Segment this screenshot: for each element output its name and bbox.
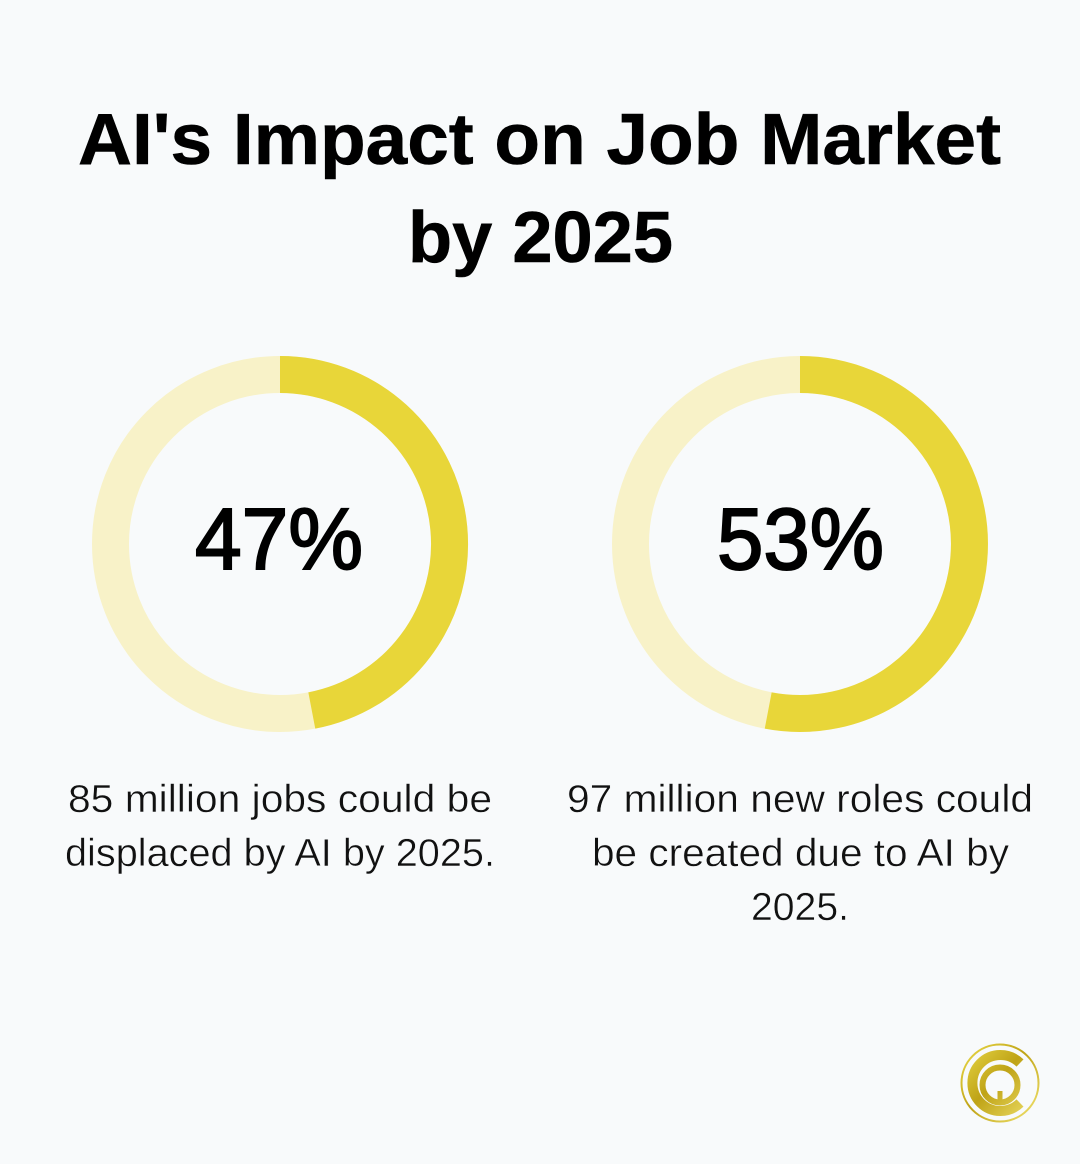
description: roles created: 2025.	[751, 886, 849, 929]
description: jobs displaced: 85 million jobs could be	[68, 778, 492, 821]
description: jobs displaced: displaced by AI by 2025.	[65, 832, 495, 875]
title: AI's Impact on Job Market	[78, 100, 1001, 180]
panel: 53% roles created	[567, 374, 1033, 929]
donut chart: 47%	[110, 374, 450, 714]
icon: gold CQ logo	[962, 1044, 1038, 1122]
title	[78, 100, 1001, 278]
description: roles created: be created due to AI by	[592, 832, 1010, 875]
panel: 47% jobs displaced	[65, 374, 495, 875]
value: 53%: 53%	[717, 491, 884, 588]
value: 47%: 47%	[195, 491, 363, 588]
title: by 2025	[408, 198, 673, 278]
description: roles created	[567, 778, 1033, 929]
donut chart: 53%	[630, 374, 970, 714]
description: roles created: 97 million new roles could	[567, 778, 1033, 821]
description: jobs displaced	[65, 778, 495, 875]
